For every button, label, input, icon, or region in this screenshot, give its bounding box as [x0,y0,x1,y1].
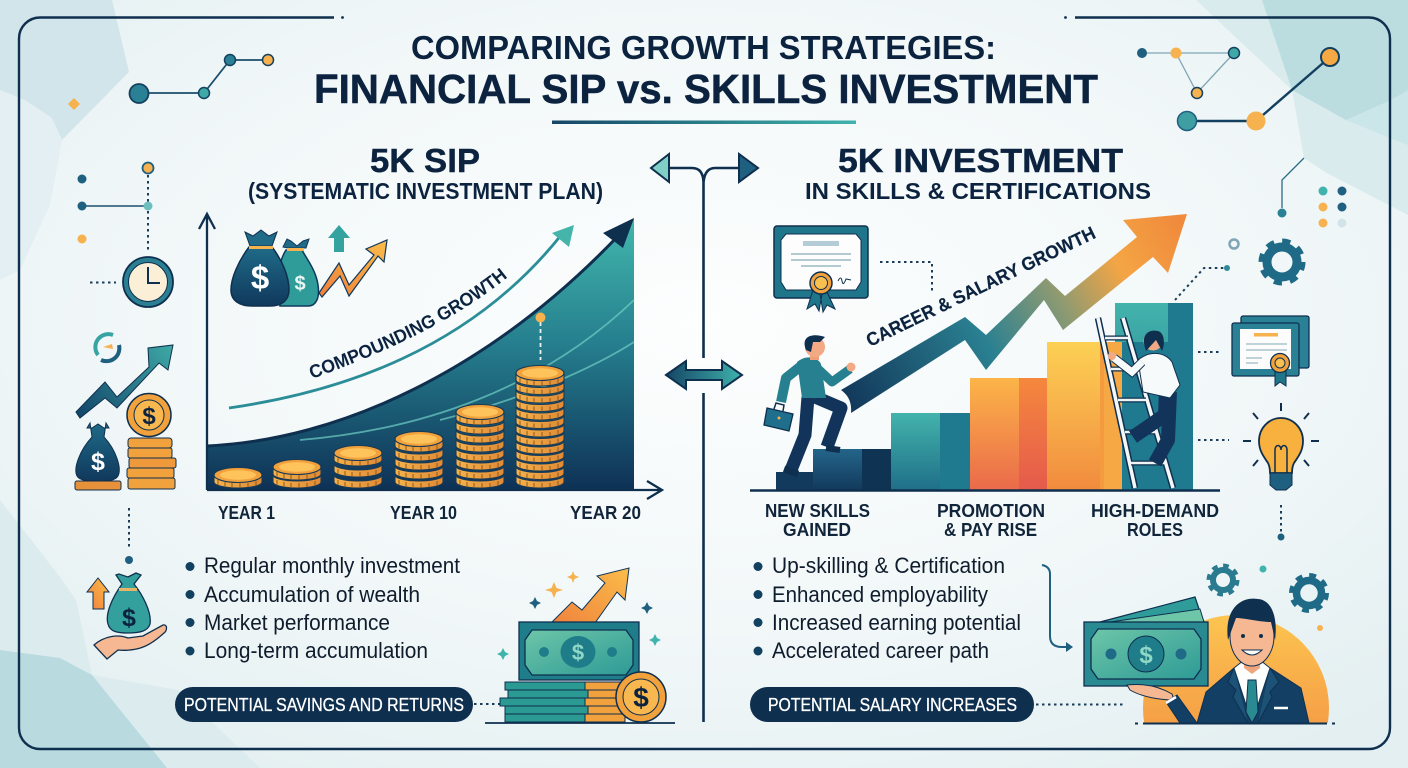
chart: compounding growth [198,212,664,523]
icon: cash stack with arrow and coin: $ [633,682,649,713]
step labels: PROMOTION [937,500,1045,521]
bullet list: SIP: Regular monthly investment [204,553,460,578]
title [314,29,1098,124]
icon: bag and coins: $ [142,403,156,430]
heading: 5K SIP: (SYSTEMATIC INVESTMENT PLAN) [248,178,603,204]
heading: 5K investment: 5K INVESTMENT [838,142,1123,179]
icon: man with banknote [1083,564,1335,724]
connector [1175,265,1230,300]
centre divider with arrows [651,154,758,722]
bar steps [776,303,1193,490]
pill: potential savings and returns [175,687,473,722]
connector [880,262,932,292]
bullet list: skills: Increased earning potential [772,610,1021,635]
icon: network nodes top right [1137,48,1339,130]
step labels: & PAY RISE [944,519,1037,540]
icon: gear [1230,240,1303,283]
axis labels: YEAR 20 [570,502,641,523]
bullet list: skills [754,553,1021,663]
right panel: 5K investment [750,142,1230,540]
connector [1278,505,1284,540]
icon: network nodes top left [68,54,274,110]
icon: certificates [1232,316,1309,386]
icon: cash stack with arrow and coin: $ [572,640,584,665]
connector [1036,704,1124,706]
connector [1198,439,1229,441]
step labels: HIGH-DEMAND [1091,500,1219,521]
bullet list: SIP [186,553,460,663]
bullet list: skills: Up-skilling & Certification [772,553,1005,578]
banknote [1084,597,1208,686]
pill: potential salary increases: POTENTIAL SALARY INCREASES [768,694,1017,715]
bullet list: SIP: Accumulation of wealth [204,582,420,607]
icon: money bags with arrow: $ [251,259,269,296]
connector [474,703,500,705]
bullet list: skills: Accelerated career path [772,638,989,663]
heading: 5K SIP: 5K SIP [370,142,480,179]
connector [1198,351,1220,353]
heading: 5K SIP [248,142,603,204]
figure: man stepping up [764,335,856,474]
frame dots [341,16,1067,19]
bent arrow [1042,565,1073,652]
icon: money bags with arrow: $ [294,273,306,295]
icon: refresh and rising arrow [76,334,173,418]
right column icons [1198,158,1346,540]
bullet list: SIP: Long-term accumulation [204,638,428,663]
pill: potential salary increases [750,687,1034,722]
step labels [765,500,1219,540]
icon: certificate [774,226,868,312]
icon: clock [90,257,173,307]
icon: bag and coins [75,394,176,490]
axis labels [218,502,641,523]
head [1244,655,1260,674]
icon: cash stack with arrow and coin [485,568,675,723]
banknote: $ [1139,642,1153,669]
label: career and salary growth: CAREER & SALARY GROWTH [863,222,1099,351]
suit [1197,668,1309,723]
icon: hand holding money bag [87,573,166,659]
icon: light bulb [1243,403,1319,490]
heading: 5K investment [805,142,1151,204]
connector [125,508,133,564]
timeline dots [78,162,154,250]
step labels: GAINED [783,519,851,540]
icon: bag and coins: $ [91,448,105,476]
label: compounding growth: COMPOUNDING GROWTH [310,268,507,378]
left column icons [75,162,176,659]
icon: hand holding money bag: $ [122,604,136,632]
bullet list: SIP: Market performance [204,610,390,635]
heading: 5K investment: IN SKILLS & CERTIFICATIONS [805,178,1151,204]
coin stacks [214,366,564,488]
circuit and dot grid [1278,158,1346,228]
figure: ladder and climber [1098,318,1180,488]
big career arrow [841,214,1187,413]
icon: money bags with arrow [231,225,387,306]
step labels: NEW SKILLS [765,500,870,521]
gears [1209,566,1326,631]
axis labels: YEAR 1 [218,502,275,523]
left panel: 5K SIP [198,142,664,523]
baseline [750,489,1220,492]
title: COMPARING GROWTH STRATEGIES: [411,29,996,66]
axis labels: YEAR 10 [390,502,457,523]
step labels: ROLES [1127,519,1183,540]
bullet list: skills: Enhanced employability [772,582,988,607]
pill: potential savings and returns: POTENTIAL SAVINGS AND RETURNS [184,694,464,715]
title: FINANCIAL SIP vs. SKILLS INVESTMENT [314,66,1098,112]
